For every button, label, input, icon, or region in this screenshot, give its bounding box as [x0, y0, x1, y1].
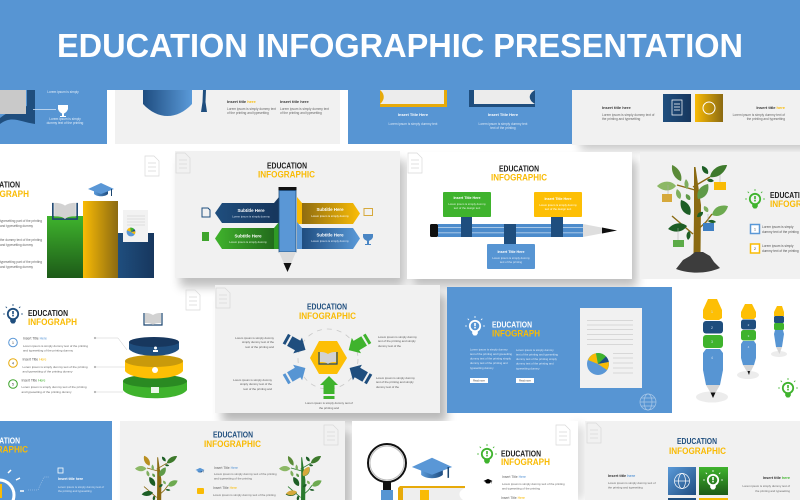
cylinder: green: [123, 374, 187, 398]
box: green: text of the design text: [454, 206, 481, 210]
arrow: yellow: [297, 197, 360, 224]
slide: top-right grey: the printing and typesetting: [747, 117, 785, 121]
slide: magnifier: and typesetting of the printing: [502, 486, 540, 490]
document with pie chart: [580, 308, 642, 388]
slide: top-right grey: [572, 85, 800, 150]
slide: tiles: [585, 421, 800, 500]
slide: two trees: Insert Title Here: [213, 486, 237, 490]
icon: green bulb: [477, 444, 497, 464]
tags: [662, 175, 726, 247]
slide: tiles: Insert title here: [763, 476, 790, 480]
heading: INFOGRAPH: [492, 328, 540, 340]
arrow: green: Subtitle Here: [234, 234, 262, 238]
heading: INFOGRAPH: [501, 457, 550, 468]
text column 1: dummy text of the printing simply: [470, 356, 511, 360]
icon: magnifying glass: [368, 444, 406, 500]
slide: graduation cap fragment: [115, 85, 340, 144]
bar: navy: [118, 233, 154, 278]
slide: books on blue: text of the printing: [490, 126, 516, 130]
slide: graduation cap fragment: of the printing and typesetting: [280, 111, 322, 115]
pencil: medium: [737, 304, 759, 379]
labels: text of the printing and: [243, 387, 272, 391]
buttons: Read more: [519, 380, 532, 382]
box: blue: [487, 244, 535, 269]
text column 2: typesetting dummy: [516, 366, 540, 370]
icon: open book corner: [0, 90, 35, 124]
heading: [204, 430, 261, 450]
heading: EDUCATION: [28, 309, 68, 318]
arrow: navy: Subtitle Here: [237, 208, 265, 213]
slide: top-right grey: Insert title here: [602, 105, 631, 110]
slide: pencil with arrows: [175, 151, 405, 287]
slide: magnifier: Lorem ipsum is simply dummy text of the printing: [502, 482, 565, 486]
slide: tree: Lorem ipsum is simply: [762, 225, 794, 229]
slide: books on blue: [348, 85, 572, 144]
labels: Lorem ipsum is simply dummy: [378, 335, 417, 339]
heading: [492, 320, 540, 340]
slide: tree: [640, 152, 800, 279]
icon: cap bottom: [143, 85, 192, 116]
labels: dummy text of the: [378, 344, 401, 348]
slide: tiles: Lorem ipsum is simply dummy text of: [608, 481, 656, 485]
list item 2: Insert Title Here: [22, 358, 47, 362]
slide: top-left blue fragment: dummy text of the printing: [47, 121, 84, 125]
arrow: blue: Lorem ipsum is simply dummy: [311, 239, 349, 243]
tree: left: [135, 454, 179, 500]
pencil: large: 2: [711, 326, 713, 330]
slide: top-left blue fragment: Lorem ipsum is simply: [47, 90, 79, 94]
icons: document, book, tile, trophy: [202, 208, 373, 245]
slide: bars with book and cap: typesetting part of the printing: [0, 260, 42, 264]
slide: books on blue: Insert Title Here: [398, 112, 429, 117]
box: yellow: text of the design text: [545, 207, 572, 211]
slide: books on blue: Insert Title Here: [488, 112, 519, 117]
tree: [657, 162, 730, 255]
list item 3: [9, 378, 87, 394]
slide: graduation cap fragment: Lorem ipsum is simply dummy text: [227, 107, 276, 111]
arrow: yellow: Subtitle Here: [316, 207, 344, 212]
list item 1: and typesetting of the printing dummy: [23, 348, 74, 352]
pencil: small: [771, 306, 787, 357]
slide: magnifier: Insert Title Here: [502, 475, 526, 479]
slide: bottom-left blue: Lorem ipsum is simply dummy text of: [58, 485, 104, 489]
tile: bulb: [699, 467, 728, 495]
list item 2: Lorem ipsum is simply dummy text of the printing: [22, 365, 88, 369]
heading: [258, 162, 315, 180]
slide: tree: dummy text of the printing: [762, 249, 799, 253]
heading: EDUCATION: [213, 430, 253, 440]
icon: paper with pie: [123, 210, 148, 242]
slide: bars with book and cap: and typesetting dummy: [0, 265, 33, 269]
text column 2: dummy text of the printing simply: [516, 357, 557, 361]
icon: yellow book: [380, 90, 447, 107]
text column 1: dummy text of the printing and: [470, 361, 508, 365]
labels: text of the printing and: [245, 345, 274, 349]
text column 2: Lorem ipsum is simply dummy: [516, 348, 554, 352]
list item 1: 1: [12, 341, 14, 345]
slide: bars with book and cap: typesetting part of the printing: [0, 219, 42, 223]
pencil: medium: 3: [748, 334, 750, 338]
slide: top-right grey: Lorem ipsum is simply dummy text of: [733, 113, 785, 117]
heading: [501, 450, 550, 468]
icon: bulb: [3, 304, 23, 324]
pencil: medium: 4: [748, 345, 750, 349]
box: blue: Insert Title Here: [497, 250, 525, 254]
pencil: large: 1: [711, 310, 713, 314]
icon: book: [144, 313, 162, 325]
labels: dummy text of the: [376, 385, 399, 389]
badge 1: 1: [754, 228, 756, 232]
icon: globe: [640, 394, 656, 410]
slide: tree: dummy text of the printing: [762, 230, 799, 234]
badge 1: [750, 224, 760, 234]
slide: two trees: Insert Title Here: [214, 466, 238, 470]
heading: EDUCATION: [267, 162, 307, 170]
slide: top-right grey: the printing and typesetting: [602, 117, 641, 121]
icon: book: [53, 203, 77, 219]
labels: text of the printing and simply: [378, 339, 416, 343]
tile: globe: [668, 467, 696, 495]
slide: stacked cylinders: [3, 290, 200, 398]
slide: bars with book and cap: and typesetting dummy: [0, 243, 33, 247]
pencil: [430, 224, 617, 237]
list item 3: 5: [12, 382, 14, 386]
arrow: lower-left blue: [281, 360, 310, 387]
icon: tassel: [201, 90, 207, 112]
labels: [233, 335, 417, 410]
slide: tiles: the printing and typesetting: [608, 486, 643, 490]
icon: green bulb: [745, 189, 765, 208]
slide: two trees: Lorem ipsum is simply dummy text of the printing: [213, 493, 276, 497]
connector bands: [461, 217, 563, 244]
badge 2: 2: [754, 247, 756, 251]
heading: EDUCATION: [492, 320, 532, 330]
list item 3: Insert Title Here: [22, 378, 46, 382]
list item 2: 4: [12, 362, 14, 366]
slide: top-right grey: Lorem ipsum is simply dummy text of: [602, 113, 655, 117]
heading: EDUCATION: [677, 437, 717, 446]
slide: top-left blue fragment: Lorem ipsum is simply: [49, 117, 81, 121]
slide: bars with book and cap: the dummy text of the printing: [0, 238, 42, 242]
heading: [669, 437, 726, 457]
tree: right: [279, 454, 323, 500]
box: green: Lorem ipsum is simply dummy: [448, 202, 486, 206]
labels: Lorem ipsum is simply dummy: [376, 376, 415, 380]
labels: simply dummy text of the: [240, 382, 272, 386]
box: blue: Lorem ipsum is simply dummy: [492, 256, 530, 260]
labels: Lorem ipsum is simply dummy text of: [305, 401, 353, 405]
box: yellow: Insert Title Here: [544, 197, 572, 201]
slide: graduation cap fragment: of the printing and typesetting: [227, 111, 269, 115]
arrow: top-left navy: [281, 331, 310, 358]
icon: small cap: [483, 479, 493, 484]
labels: text of the printing and simply: [376, 380, 414, 384]
box: green: Insert Title Here: [453, 196, 481, 200]
heading: [299, 302, 356, 322]
slide: tree: Lorem ipsum is simply: [762, 244, 794, 248]
icon: sun bulb: [0, 470, 24, 500]
slide: graduation cap fragment: Insert title here: [227, 99, 256, 104]
buttons: [470, 378, 534, 383]
text column 2: text of the printing and typesetting: [516, 352, 558, 356]
arrow: yellow: Lorem ipsum is simply dummy: [311, 214, 349, 218]
heading: EDUCATION: [499, 164, 539, 174]
icon: cap: [195, 468, 205, 473]
slide: pencil timeline: [407, 152, 637, 287]
icon tile: navy document: [663, 94, 691, 122]
slide: graduation cap fragment: Lorem ipsum is simply dummy text: [280, 107, 329, 111]
text column 2: [516, 348, 558, 370]
slide: books on blue: Lorem ipsum is simply dummy text: [389, 122, 438, 126]
pencil: large: 4: [711, 356, 713, 360]
icon: graduation cap: [412, 458, 452, 478]
slide: bottom-left blue: the printing and typesetting: [58, 489, 92, 493]
slide: top-left blue fragment: [0, 85, 107, 144]
slide: books on blue: Lorem ipsum is simply dummy text: [479, 122, 528, 126]
text column 1: text of the printing and typesetting: [470, 352, 512, 356]
labels: the printing and: [319, 406, 339, 410]
heading: INFOGRAPHIC: [669, 446, 726, 457]
pencil: medium: 2: [748, 323, 750, 327]
arrow: navy: [215, 197, 279, 223]
arrow: blue: [297, 222, 360, 249]
text column 1: [470, 348, 512, 370]
slide: two trees: and typesetting of the printing: [214, 476, 252, 480]
heading: [491, 164, 547, 184]
heading: [28, 309, 77, 328]
icon: window: [58, 468, 63, 473]
labels: Lorem ipsum is simply dummy: [235, 336, 275, 340]
slide: bars with book and cap: and typesetting dummy: [0, 224, 33, 228]
slide: two trees: [120, 421, 352, 500]
slide: tiles: Lorem ipsum is simply dummy text of: [742, 484, 790, 488]
hexagon: [310, 341, 347, 374]
list item 1: Insert Title Here: [23, 336, 47, 340]
leader lines: [94, 337, 127, 393]
cylinder icons: [151, 346, 159, 393]
slide: bottom-left blue: Insert title here: [58, 477, 83, 481]
bar: yellow: [83, 201, 118, 278]
rock: [676, 252, 720, 273]
list item 3: Lorem ipsum is simply dummy text of the printing: [22, 385, 87, 389]
pencil: [278, 187, 296, 272]
arrow: bottom green: [320, 376, 338, 399]
icon: navy book: [469, 90, 535, 107]
arrow: navy: Lorem ipsum is simply dummy: [232, 214, 270, 218]
cylinder: navy: [129, 337, 179, 356]
slide: bars with book and cap: [0, 156, 159, 278]
slide: top-right grey: Insert title here: [756, 105, 786, 110]
heading: INFOGRAPHIC: [258, 170, 315, 180]
icon: white bulb: [465, 316, 485, 336]
dashed ring: [298, 329, 358, 389]
slide: magnifier: [352, 421, 584, 500]
slide: hexagon arrows: [215, 285, 447, 422]
text column 1: typesetting dummy: [470, 366, 494, 370]
heading: EDUCATION: [501, 450, 541, 458]
title: EDUCATION INFOGRAPHIC PRESENTATION: [57, 27, 743, 64]
arrow: top-right green: [344, 331, 373, 358]
box: yellow: [534, 192, 582, 217]
box: yellow: Lorem ipsum is simply dummy: [539, 203, 577, 207]
header band: [0, 0, 800, 90]
tile: yellow: [699, 498, 728, 500]
slide: magnifier: Insert Title Here: [501, 496, 525, 500]
pencil: large: 3: [711, 340, 713, 344]
badge 2: [750, 244, 760, 253]
arrow: blue: Subtitle Here: [316, 232, 344, 238]
labels: simply dummy text of the: [242, 340, 274, 344]
list item 1: [9, 336, 88, 352]
text column 2: dummy text of the printing and: [516, 362, 554, 366]
box: green: [443, 192, 491, 217]
arrow: green: [215, 222, 279, 249]
arrow: lower-right navy: [345, 360, 374, 387]
cylinder: yellow: [125, 355, 183, 378]
slide: graduation cap fragment: Insert title here: [280, 99, 309, 104]
pencil: large: [696, 299, 728, 402]
heading: INFOGRAPHIC: [204, 439, 261, 450]
icon tile: yellow clock: [695, 94, 723, 122]
slide: blue document: [447, 287, 672, 413]
icon: trophy: [58, 105, 68, 117]
heading: INFOGRAPHIC: [491, 172, 547, 184]
heading: INFOGRAPHIC: [299, 311, 356, 322]
buttons: Read more: [473, 380, 486, 382]
icon: lock: [197, 488, 204, 494]
slide: tiles: the printing and typesetting: [755, 489, 790, 493]
list item 2: [9, 358, 88, 374]
icon: green bulb: [778, 378, 798, 398]
slide: tiles: Insert title here: [608, 474, 635, 478]
slide: two trees: Lorem ipsum is simply dummy text of the printing: [214, 472, 277, 476]
arrow: green: Lorem ipsum is simply dummy: [229, 240, 267, 244]
bar: green: [47, 216, 83, 278]
icon: book: [398, 486, 465, 500]
list item 3: and typesetting of the printing dummy: [22, 390, 72, 394]
list item 2: and typesetting of the printing dummy: [22, 370, 73, 374]
list item 1: Lorem ipsum is simply dummy text of the printing: [23, 344, 88, 348]
icon: graduation cap: [88, 183, 114, 196]
tile: navy: [668, 498, 696, 500]
slide: bottom-left blue: [0, 421, 112, 500]
labels: Lorem ipsum is simply dummy: [233, 378, 273, 382]
box: blue: text of the printing: [500, 260, 523, 264]
text column 1: Lorem ipsum is simply dummy: [470, 348, 508, 352]
heading: INFOGRAPH: [28, 317, 77, 328]
heading: EDUCATION: [307, 302, 347, 312]
icon: book: [319, 352, 337, 364]
